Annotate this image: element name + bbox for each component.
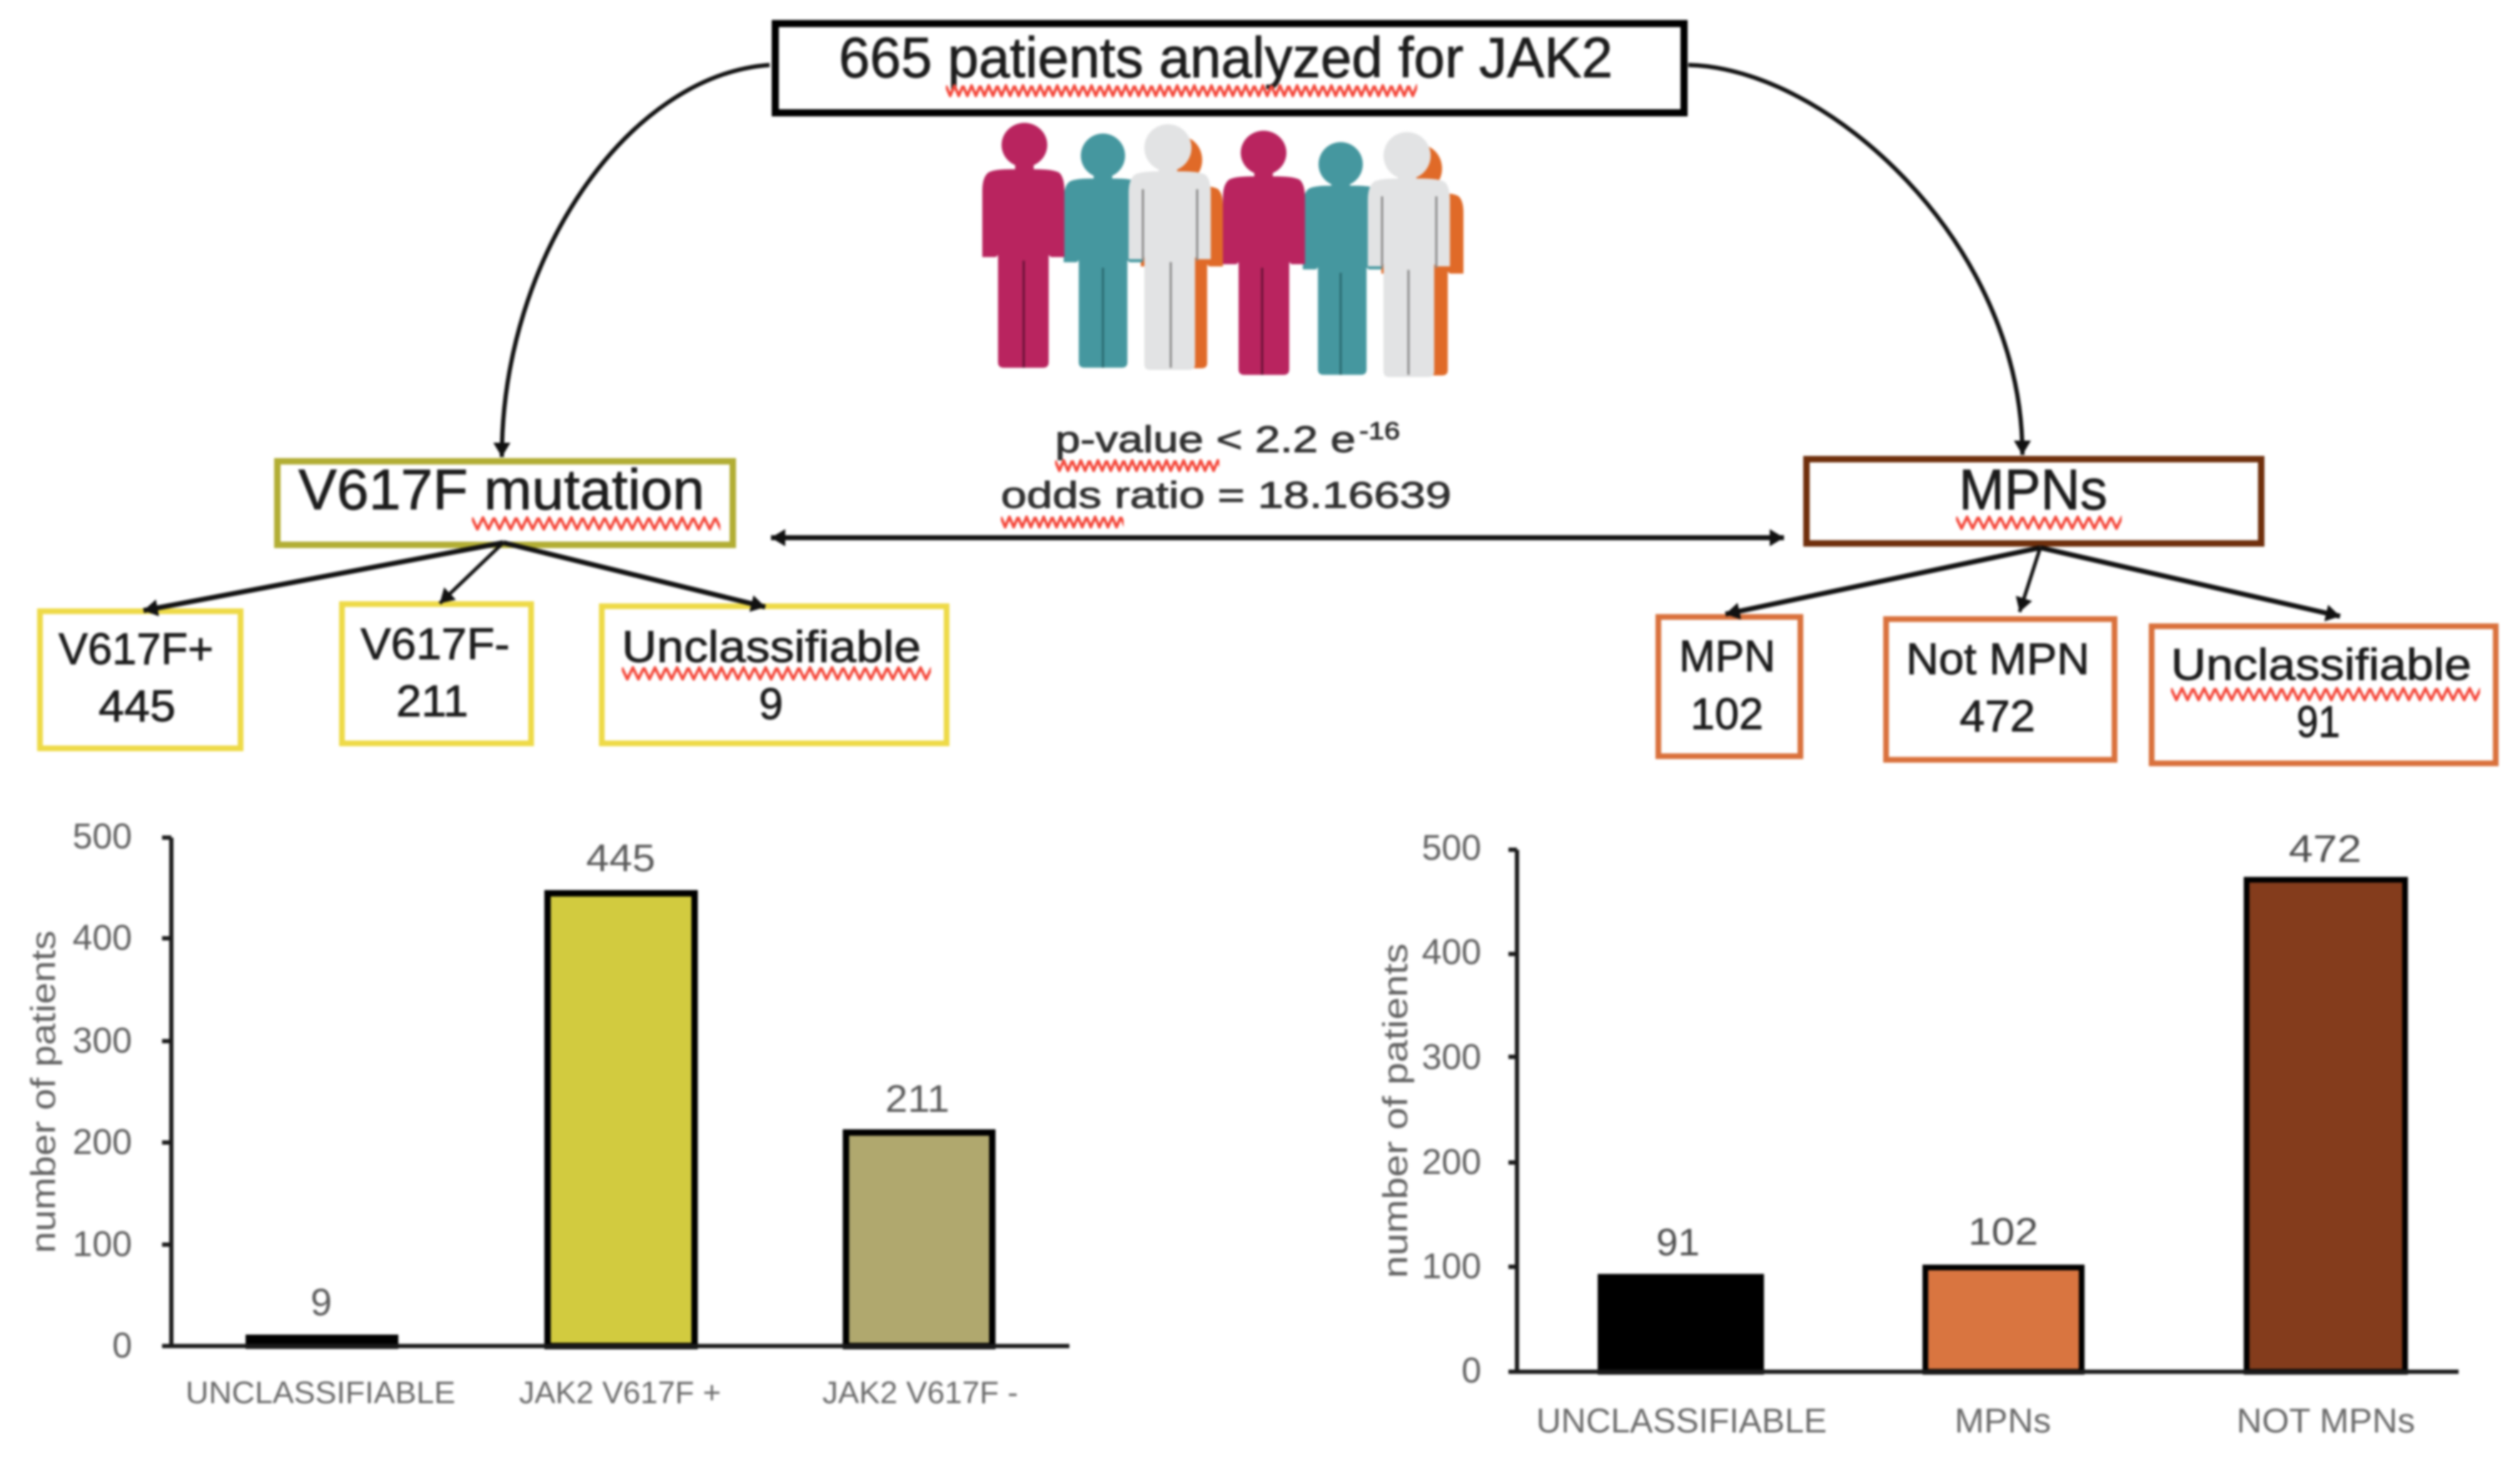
arrow: title to MPNs — [1688, 65, 2022, 455]
bar: not MPNs — [2247, 880, 2405, 1372]
value labels: 445 — [586, 837, 655, 880]
y axis tick labels: 500 — [1422, 828, 1481, 868]
box: Not MPN 472 — [1886, 619, 2115, 760]
box: Not MPN 472: 472 — [1960, 692, 2035, 741]
figure: teal person left — [1064, 134, 1142, 368]
box: V617F+ 445 — [40, 611, 241, 748]
y axis tick labels: 300 — [1422, 1037, 1481, 1077]
figure: teal person right — [1303, 142, 1381, 375]
category labels — [186, 1375, 1018, 1410]
box: V617F mutation — [277, 458, 732, 545]
y axis tick labels: 100 — [1422, 1246, 1481, 1286]
y axis tick labels: 200 — [73, 1122, 132, 1162]
bar chart: V617F status — [25, 816, 1069, 1410]
bar: JAK2 V617F - — [846, 1133, 992, 1346]
box: Unclassifiable 9: 9 — [759, 680, 783, 729]
category labels: JAK2 V617F + — [519, 1375, 721, 1410]
box: V617F mutation: V617F mutation — [298, 458, 705, 521]
box: Unclassifiable 9 — [602, 606, 947, 743]
figure: magenta person left — [982, 123, 1064, 368]
bar: MPNs — [1925, 1267, 2082, 1372]
box: Unclassifiable 91: Unclassifiable — [2171, 641, 2471, 690]
y axis tick labels: 0 — [1461, 1350, 1481, 1390]
value labels — [311, 837, 949, 1324]
category labels: JAK2 V617F - — [822, 1375, 1018, 1410]
box: Unclassifiable 9: Unclassifiable — [622, 623, 921, 672]
box: V617F- 211: V617F- — [361, 620, 510, 669]
y axis tick labels — [73, 816, 132, 1365]
box: Unclassifiable 91 — [2152, 626, 2496, 763]
value labels: 102 — [1968, 1210, 2038, 1253]
box: MPN 102 — [1658, 617, 1800, 756]
box: V617F+ 445: V617F+ — [59, 625, 213, 674]
odds ratio — [1001, 475, 1451, 528]
axes — [162, 838, 1069, 1346]
category labels: UNCLASSIFIABLE — [186, 1375, 455, 1410]
axes — [1508, 850, 2459, 1372]
y axis title: number of patients — [25, 930, 63, 1253]
bar: unclassifiable — [248, 1337, 395, 1346]
box: Unclassifiable 91: 91 — [2297, 698, 2340, 747]
value labels: 211 — [885, 1078, 949, 1120]
category labels: UNCLASSIFIABLE — [1536, 1402, 1827, 1440]
y axis tick labels: 400 — [1422, 932, 1481, 972]
p-value: p-value < 2.2 e — [1055, 419, 1356, 461]
y axis tick labels: 0 — [112, 1325, 132, 1365]
figure: magenta person right — [1223, 131, 1305, 375]
statistics text — [1001, 418, 1451, 528]
double-headed arrow between V617F and MPNs — [771, 536, 1784, 540]
category labels: MPNs — [1955, 1402, 2051, 1440]
figure: orange person back right — [1381, 145, 1463, 376]
y axis tick labels: 100 — [73, 1224, 132, 1264]
category labels: NOT MPNs — [2237, 1402, 2415, 1440]
title box: 665 patients analyzed for JAK2 — [839, 26, 1613, 89]
p-value: -16 — [1359, 418, 1400, 445]
box: V617F- 211: 211 — [396, 677, 468, 726]
value labels: 472 — [2289, 828, 2362, 870]
box: MPN 102: 102 — [1690, 690, 1763, 739]
box: MPNs: MPNs — [1959, 458, 2107, 521]
y axis title: number of patients — [1377, 943, 1415, 1278]
y axis tick labels: 200 — [1422, 1142, 1481, 1182]
category labels — [1536, 1402, 2415, 1440]
bar chart: MPN status — [1377, 828, 2459, 1440]
box: V617F- 211 — [342, 604, 531, 743]
p-value — [1055, 418, 1400, 472]
value labels — [1656, 828, 2362, 1264]
title box — [775, 24, 1684, 113]
value labels: 91 — [1656, 1221, 1700, 1264]
bar: unclassifiable — [1601, 1277, 1761, 1372]
figure: white person left — [1129, 124, 1211, 370]
y axis tick labels: 500 — [73, 816, 132, 856]
y axis tick labels: 300 — [73, 1020, 132, 1060]
box: Not MPN 472: Not MPN — [1906, 635, 2090, 684]
figure: white person right — [1368, 132, 1450, 377]
arrows: MPN branches — [1725, 548, 2340, 616]
y axis tick labels: 400 — [73, 918, 132, 958]
arrows: V617F branches — [143, 543, 765, 611]
box: V617F+ 445: 445 — [99, 682, 176, 731]
y axis tick labels — [1422, 828, 1481, 1390]
figure: orange person back left — [1141, 136, 1223, 368]
bar: JAK2 V617F + — [548, 893, 695, 1346]
value labels: 9 — [311, 1281, 332, 1324]
box: MPN 102: MPN — [1679, 632, 1775, 681]
odds ratio: odds ratio = 18.16639 — [1001, 475, 1451, 516]
box: MPNs — [1806, 458, 2262, 543]
arrow: title to V617F mutation — [502, 65, 770, 457]
icon: group of patients — [982, 123, 1463, 377]
